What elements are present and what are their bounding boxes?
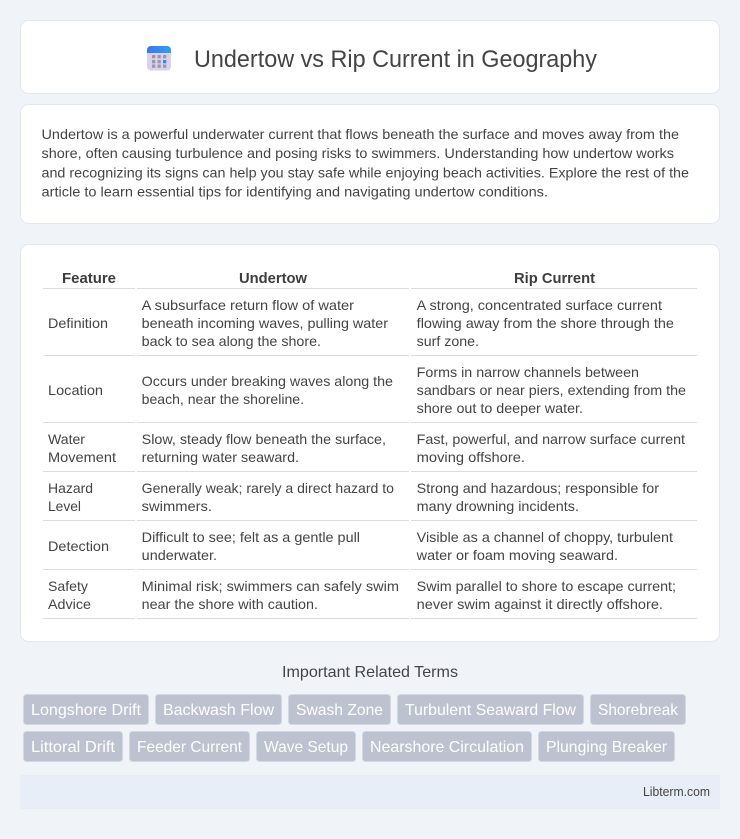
tag: Swash Zone: Swash Zone <box>296 702 383 719</box>
row: location: sandbars or near piers, extending from the <box>417 382 686 398</box>
row: safety advice: Advice <box>48 596 91 612</box>
row: location: shore out to deeper water. <box>417 400 583 416</box>
row: location: Location <box>48 382 103 398</box>
tag: Wave Setup <box>256 732 356 762</box>
row: hazard level <box>48 480 659 514</box>
footer credit: Libterm.com <box>643 785 710 799</box>
tag: Longshore Drift <box>24 694 148 724</box>
tag: Plunging Breaker: Plunging Breaker <box>546 739 668 756</box>
row: water movement: moving offshore. <box>417 449 525 465</box>
row: safety advice: Swim parallel to shore to escape current; <box>417 578 676 594</box>
heading: related terms: Important Related Terms <box>282 664 458 681</box>
row: location: Forms in narrow channels between <box>417 364 639 380</box>
row: hazard level: many drowning incidents. <box>417 498 579 514</box>
table header row: Feature <box>62 270 116 287</box>
footer <box>20 775 720 809</box>
row: detection: Difficult to see; felt as a gentle pull <box>142 529 360 545</box>
row: definition: flowing away from the shore through the <box>417 315 674 331</box>
tag: Turbulent Seaward Flow <box>398 694 584 724</box>
icon: calendar <box>147 46 171 70</box>
row: definition <box>48 297 674 349</box>
tag: Nearshore Circulation: Nearshore Circulation <box>370 739 524 756</box>
tag: Nearshore Circulation <box>362 732 532 762</box>
row: safety advice: Safety <box>48 578 88 594</box>
row: safety advice: never swim against it directly offshore. <box>417 596 663 612</box>
panel: introduction <box>20 104 720 224</box>
intro paragraph <box>42 126 689 200</box>
row: water movement: Fast, powerful, and narrow surface current <box>417 431 685 447</box>
title: Undertow vs Rip Current in Geography <box>194 46 597 73</box>
row: detection: underwater. <box>142 547 217 563</box>
row: detection: water or foam moving seaward. <box>416 547 618 563</box>
row: safety advice: Minimal risk; swimmers can safely swim <box>142 578 399 594</box>
row: definition: beneath incoming waves, pulling water <box>142 315 388 331</box>
table header row: Rip Current <box>514 270 595 287</box>
tag: Littoral Drift: Littoral Drift <box>31 739 116 756</box>
row: location: beach, near the shoreline. <box>142 391 304 407</box>
tag: Littoral Drift <box>24 732 122 762</box>
row: definition: A strong, concentrated surface current <box>417 297 662 313</box>
intro paragraph: shore, often causing turbulence and posing risks to swimmers. Understanding how undertow works <box>42 145 674 161</box>
panel: related term tags <box>24 694 686 762</box>
row: definition: surf zone. <box>417 333 479 349</box>
table header row: Undertow <box>239 270 307 287</box>
row: detection: Visible as a channel of choppy, turbulent <box>417 529 673 545</box>
tag: Longshore Drift: Longshore Drift <box>31 702 142 719</box>
row: hazard level: Generally weak; rarely a direct hazard to <box>142 480 394 496</box>
row: water movement <box>48 431 685 465</box>
intro paragraph: Undertow is a powerful underwater current that flows beneath the surface and moves away from the <box>42 126 679 142</box>
row: definition: back to sea along the shore. <box>142 333 321 349</box>
tag: Backwash Flow <box>156 694 282 724</box>
row: hazard level: Level <box>48 498 81 514</box>
row: safety advice: near the shore with caution. <box>142 596 318 612</box>
panel: title card <box>20 20 720 94</box>
row: location <box>48 364 686 416</box>
row: hazard level: Strong and hazardous; responsible for <box>417 480 659 496</box>
row: water movement: Movement <box>48 449 116 465</box>
row: location: Occurs under breaking waves along the <box>142 373 393 389</box>
row: definition: Definition <box>48 315 108 331</box>
row: water movement: Slow, steady flow beneath the surface, <box>142 431 386 447</box>
tag: Turbulent Seaward Flow: Turbulent Seaward Flow <box>405 702 576 719</box>
intro paragraph: and recognizing its signs can help you stay safe while enjoying beach activities. Explore the rest of the <box>42 164 689 180</box>
row: hazard level: Hazard <box>48 480 93 496</box>
tag: Wave Setup: Wave Setup <box>264 739 348 756</box>
tag: Plunging Breaker <box>538 732 674 762</box>
table header row <box>62 270 595 287</box>
tag: Feeder Current: Feeder Current <box>137 739 243 756</box>
tag: Shorebreak <box>590 694 686 724</box>
row: water movement: Water <box>48 431 85 447</box>
row: definition: A subsurface return flow of water <box>142 297 354 313</box>
tag: Swash Zone <box>288 694 390 724</box>
row: detection: Detection <box>48 538 109 554</box>
row: detection <box>48 529 673 563</box>
row: water movement: returning water seaward. <box>142 449 299 465</box>
tag: Shorebreak: Shorebreak <box>598 702 679 719</box>
tag: Backwash Flow: Backwash Flow <box>163 702 274 719</box>
tag: Feeder Current <box>130 732 250 762</box>
row: hazard level: swimmers. <box>142 498 212 514</box>
intro paragraph: article to learn essential tips for identifying and navigating undertow conditions. <box>42 184 548 200</box>
row: safety advice <box>48 578 676 612</box>
panel: comparison table <box>20 244 720 642</box>
